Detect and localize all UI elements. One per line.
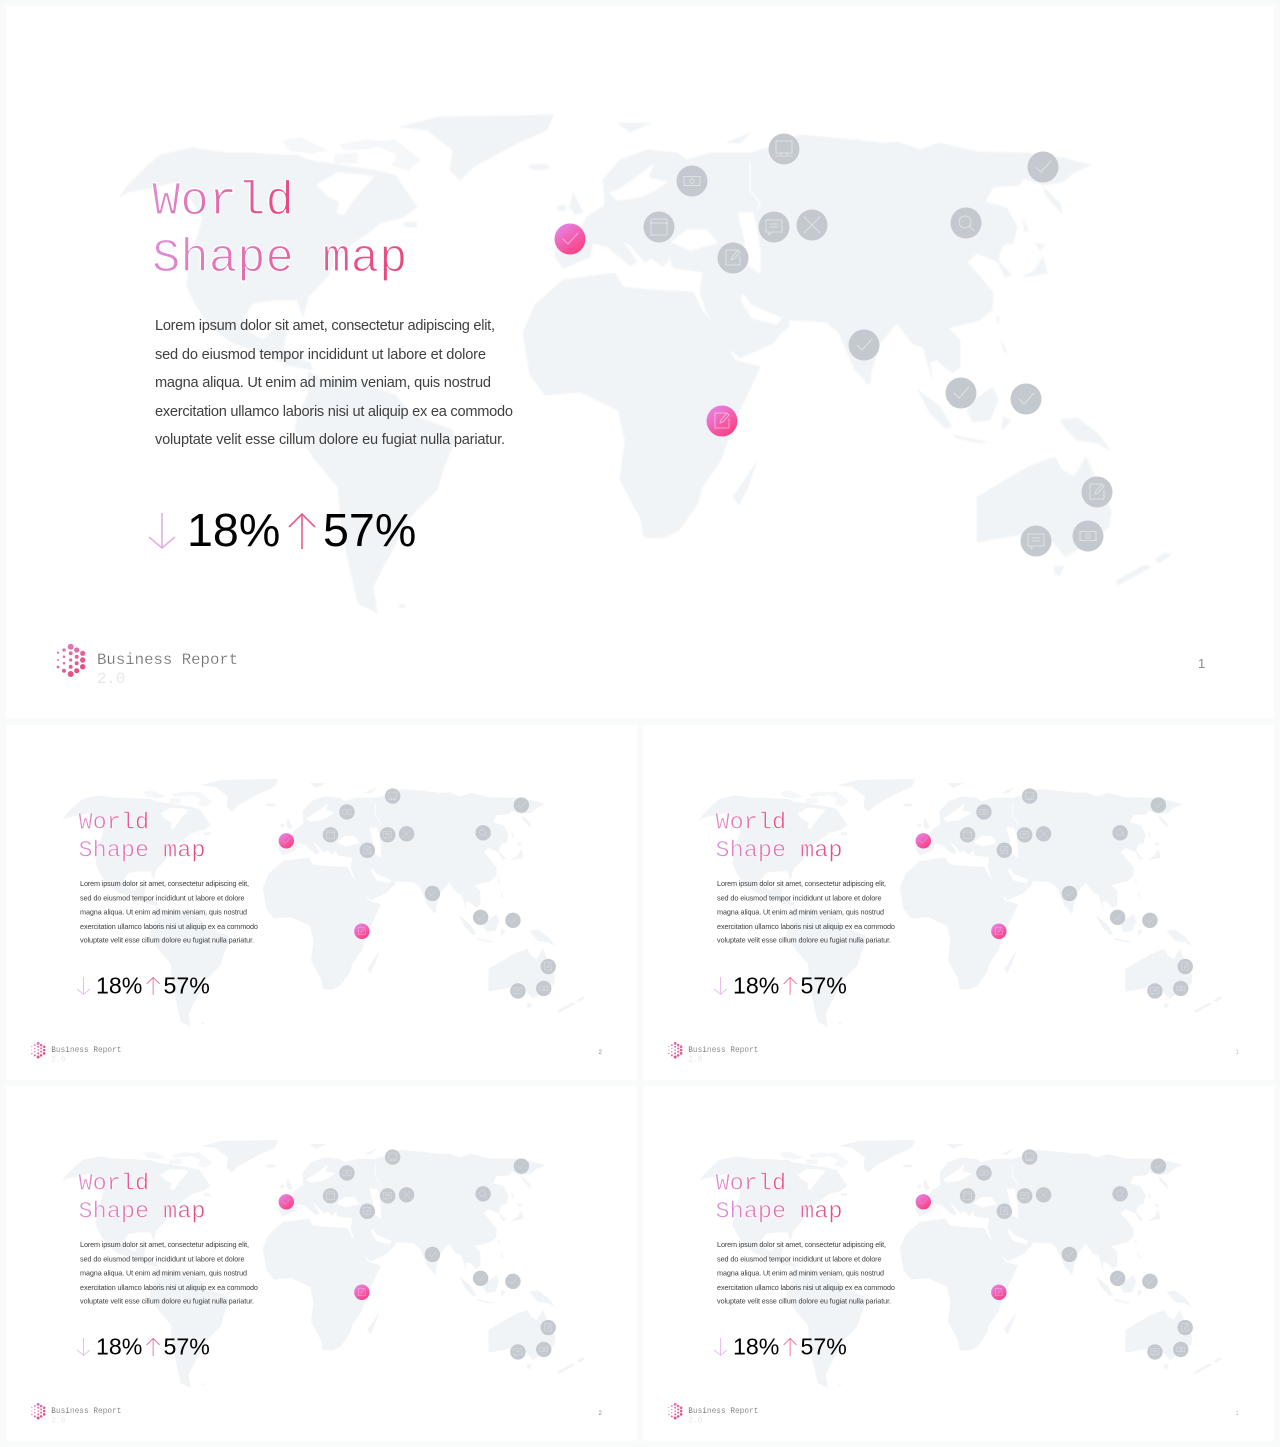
panel: thumbnail bottom right: sed do eiusmod tempor incididunt ut labore et dolore (717, 1254, 882, 1263)
body text: magna aliqua. Ut enim ad minim veniam, quis nostrud (155, 375, 491, 391)
panel: thumbnail top right: magna aliqua. Ut enim ad minim veniam, quis nostrud (717, 907, 884, 916)
pin: cash (676, 166, 708, 196)
world map (120, 115, 1171, 613)
panel: thumbnail bottom left: World (79, 1170, 149, 1197)
brand name: Business Report (97, 651, 238, 669)
panel: thumbnail top right: exercitation ullamco laboris nisi ut aliquip ex ea commodo (717, 922, 895, 931)
panel: thumbnail bottom right: 2.0 (688, 1417, 703, 1425)
icon: down arrow (149, 513, 175, 548)
panel: thumbnail bottom right: 1 (1235, 1410, 1239, 1417)
panel: thumbnail top left (6, 725, 637, 1080)
panel: thumbnail bottom right: World (716, 1170, 786, 1197)
panel: thumbnail bottom right: Lorem ipsum dolor sit amet, consectetur adipiscing elit, (717, 1240, 886, 1249)
body text: voluptate velit esse cillum dolore eu fugiat nulla pariatur. (155, 432, 505, 448)
pin: highlighted check (554, 224, 586, 254)
pin: highlighted edit (706, 406, 738, 436)
map pins (554, 134, 1112, 556)
title (152, 176, 407, 286)
pin: window (644, 212, 674, 242)
panel: thumbnail bottom left: Shape map (79, 1199, 205, 1226)
panel: thumbnail bottom right: 18% (733, 1333, 779, 1359)
panel: thumbnail bottom left: voluptate velit esse cillum dolore eu fugiat nulla pariatur. (80, 1297, 254, 1306)
panel: thumbnail top left: magna aliqua. Ut enim ad minim veniam, quis nostrud (80, 907, 247, 916)
panel: thumbnail top right: Shape map (716, 838, 842, 865)
panel: thumbnail top right: 1 (1235, 1049, 1239, 1056)
panel: thumbnail top right: World (716, 809, 786, 836)
panel: thumbnail bottom left: exercitation ullamco laboris nisi ut aliquip ex ea commodo (80, 1283, 258, 1292)
body text: sed do eiusmod tempor incididunt ut labore et dolore (155, 347, 486, 363)
body text: exercitation ullamco laboris nisi ut aliquip ex ea commodo (155, 404, 513, 420)
logo (57, 644, 85, 677)
pin: check Malaysia (946, 378, 976, 408)
panel: thumbnail top left: World (79, 809, 149, 836)
panel: thumbnail top left: Lorem ipsum dolor sit amet, consectetur adipiscing elit, (80, 879, 249, 888)
panel: thumbnail bottom right: magna aliqua. Ut enim ad minim veniam, quis nostrud (717, 1268, 884, 1277)
panel: thumbnail bottom left: Lorem ipsum dolor sit amet, consectetur adipiscing elit, (80, 1240, 249, 1249)
panel: thumbnail top left: 57% (164, 972, 210, 998)
pin: check Siberia (1028, 152, 1058, 182)
panel: thumbnail bottom right: Shape map (716, 1199, 842, 1226)
panel: thumbnail top left: Business Report (51, 1047, 121, 1055)
pin: search (950, 208, 982, 238)
icon: up arrow (289, 514, 315, 549)
panel: thumbnail top right: voluptate velit esse cillum dolore eu fugiat nulla pariatur. (717, 936, 891, 945)
panel: thumbnail top right: 18% (733, 972, 779, 998)
panel: thumbnail bottom right: Business Report (688, 1408, 758, 1416)
panel: thumbnail bottom right: 57% (801, 1333, 847, 1359)
page number: 1 (1198, 656, 1205, 671)
panel: thumbnail top left: Shape map (79, 838, 205, 865)
panel: thumbnail bottom right (643, 1086, 1274, 1441)
panel: main slide (6, 6, 1274, 718)
pin: edit Australia (1082, 476, 1112, 508)
pin: close (796, 210, 828, 240)
panel: thumbnail top left: 2.0 (51, 1056, 66, 1064)
title: World (152, 176, 294, 229)
title: Shape map (152, 233, 407, 286)
pin: edit (718, 242, 748, 274)
panel: thumbnail bottom left: magna aliqua. Ut enim ad minim veniam, quis nostrud (80, 1268, 247, 1277)
panel: thumbnail top left: 18% (96, 972, 142, 998)
panel: thumbnail top left: voluptate velit esse cillum dolore eu fugiat nulla pariatur. (80, 936, 254, 945)
panel: thumbnail top right: 57% (801, 972, 847, 998)
panel: thumbnail bottom left: sed do eiusmod tempor incididunt ut labore et dolore (80, 1254, 245, 1263)
brand version: 2.0 (97, 670, 125, 688)
panel: thumbnail top left: exercitation ullamco laboris nisi ut aliquip ex ea commodo (80, 922, 258, 931)
panel: thumbnail top right: Lorem ipsum dolor sit amet, consectetur adipiscing elit, (717, 879, 886, 888)
panel: thumbnail top left: sed do eiusmod tempor incididunt ut labore et dolore (80, 893, 245, 902)
panel: thumbnail bottom left: Business Report (51, 1408, 121, 1416)
pin: check India (848, 330, 880, 360)
panel: thumbnail top right (643, 725, 1274, 1080)
body text: Lorem ipsum dolor sit amet, consectetur adipiscing elit, (155, 318, 495, 334)
pin: cash Australia (1072, 520, 1104, 552)
panel: thumbnail bottom left: 2.0 (51, 1417, 66, 1425)
pin: comment Australia (1020, 526, 1052, 556)
panel: thumbnail bottom left (6, 1086, 637, 1441)
stat: 57%: 57% (323, 504, 416, 556)
body text (155, 318, 513, 448)
pin: monitor (768, 134, 800, 164)
panel: thumbnail top right: 2.0 (688, 1056, 703, 1064)
panel: thumbnail bottom right: voluptate velit esse cillum dolore eu fugiat nulla pariatur. (717, 1297, 891, 1306)
panel: thumbnail top right: Business Report (688, 1047, 758, 1055)
pin: check Indonesia (1010, 384, 1042, 414)
panel: thumbnail bottom left: 57% (164, 1333, 210, 1359)
pin: comment (758, 212, 790, 242)
stat: 18%: 18% (187, 504, 280, 556)
panel: thumbnail top left: 2 (598, 1049, 602, 1056)
panel: thumbnail bottom left: 2 (598, 1410, 602, 1417)
panel: thumbnail bottom left: 18% (96, 1333, 142, 1359)
panel: thumbnail bottom right: exercitation ullamco laboris nisi ut aliquip ex ea commodo (717, 1283, 895, 1292)
panel: thumbnail top right: sed do eiusmod tempor incididunt ut labore et dolore (717, 893, 882, 902)
